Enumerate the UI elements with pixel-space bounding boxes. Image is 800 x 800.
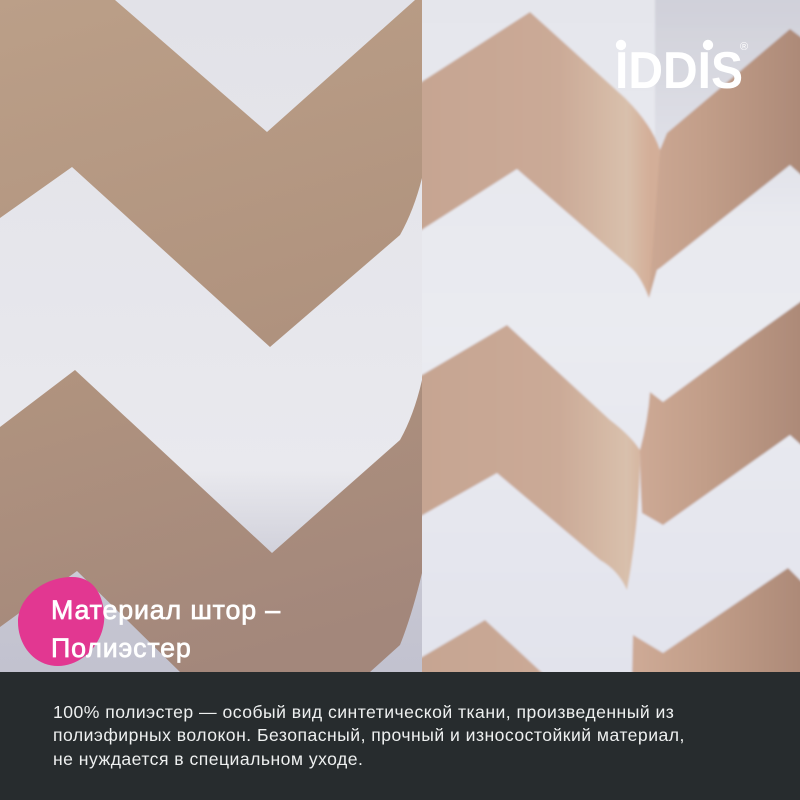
logo: iDDiS: ® <box>740 41 748 53</box>
heading: Материал штор – <box>51 595 281 625</box>
footer description text: полиэфирных волокон. Безопасный, прочный и износостойкий материал, <box>53 725 685 745</box>
middle and right curtain folds <box>410 0 800 682</box>
heading <box>51 595 281 663</box>
logo: iDDiS: IDDIS <box>615 42 743 100</box>
footer description text: 100% полиэстер — особый вид синтетической ткани, произведенный из <box>53 702 674 722</box>
footer description text <box>53 702 685 769</box>
footer panel <box>0 672 800 800</box>
footer description text: не нуждается в специальном уходе. <box>53 749 363 769</box>
heading: Полиэстер <box>51 632 192 662</box>
left curtain fold <box>0 0 423 672</box>
